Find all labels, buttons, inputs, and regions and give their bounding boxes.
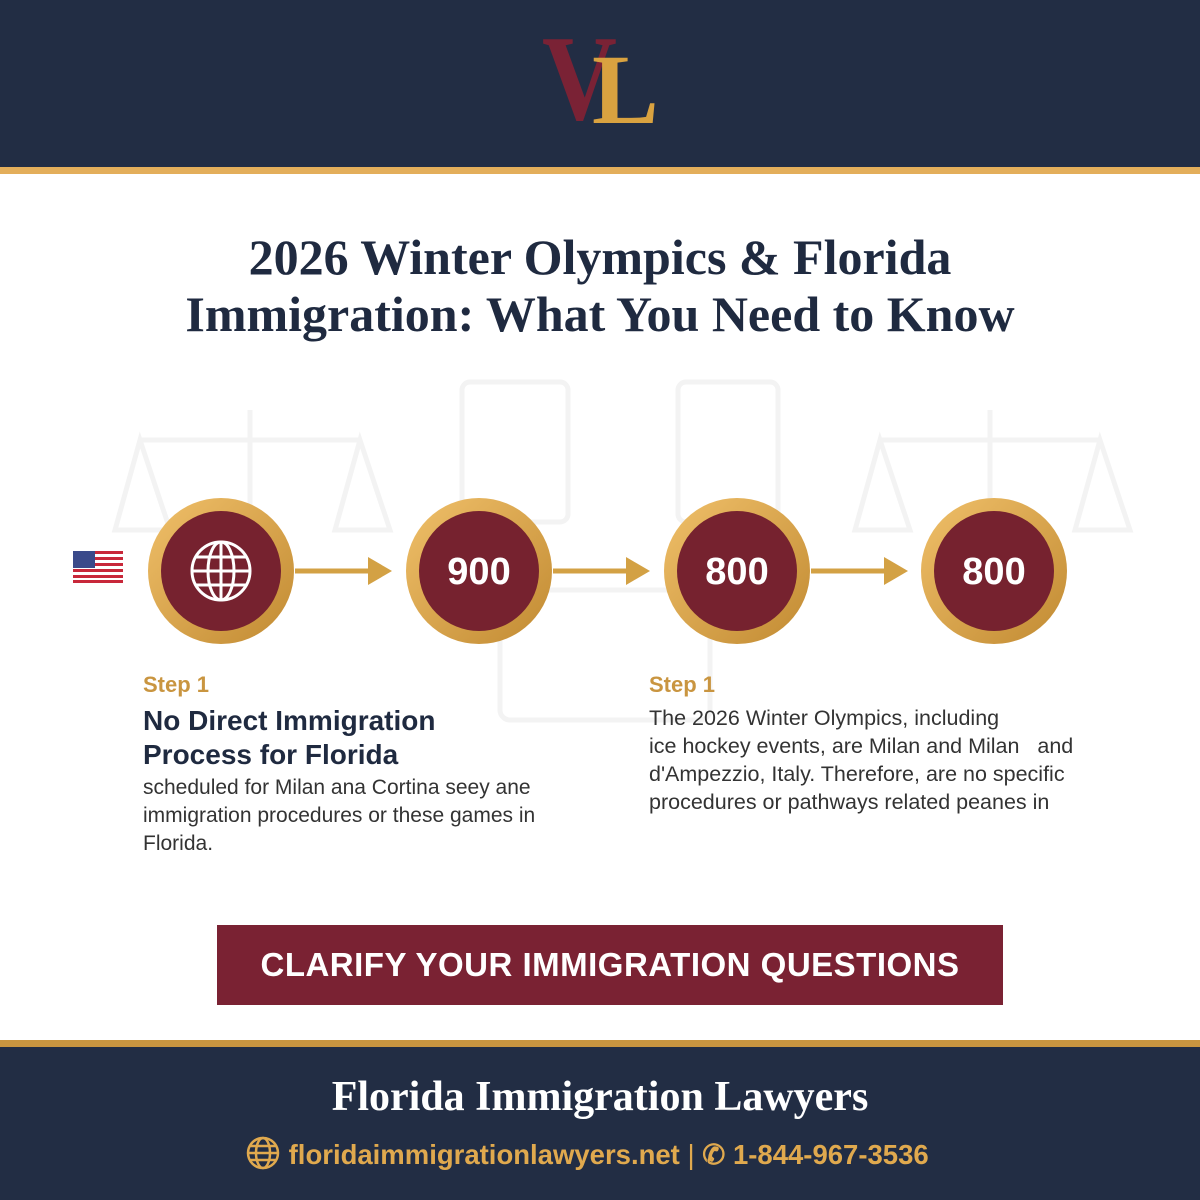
logo VL: V [542, 11, 617, 146]
logo VL: L [592, 34, 659, 145]
CTA button [217, 925, 1003, 1005]
title: 2026 Winter Olympics & Florida [249, 229, 951, 285]
footer contact: floridaimmigrationlawyers.net | ✆ 1-844-967-3536 [289, 1139, 929, 1170]
step 1 right text: procedures or pathways related peanes in [649, 790, 1049, 814]
step 1 left text: scheduled for Milan ana Cortina seey ane immigration procedures or these games in Florida. [143, 776, 535, 855]
icon: US flag [73, 551, 123, 583]
icon: globe [192, 542, 250, 600]
footer [0, 1040, 1200, 1200]
background watermark icons [112, 380, 1134, 722]
title [185, 229, 1015, 342]
process timeline [148, 498, 1067, 644]
process timeline: 900 [447, 551, 511, 593]
step 1 left text [143, 672, 535, 855]
step 1 right text: ice hockey events, are Milan and Milan and [649, 734, 1073, 758]
step 1 right text: The 2026 Winter Olympics, including [649, 706, 999, 730]
step 1 right text [649, 672, 1073, 814]
header band [0, 0, 1200, 174]
step 1 left text: Process for Florida [143, 739, 398, 770]
step 1 left text: No Direct Immigration [143, 705, 435, 736]
step 1 right text: d'Ampezzio, Italy. Therefore, are no specific [649, 762, 1065, 786]
footer name: Florida Immigration Lawyers [332, 1074, 868, 1120]
process timeline: 800 [962, 551, 1026, 593]
step 1 left text: Step 1 [143, 672, 209, 697]
logo VL [542, 11, 659, 146]
process timeline: 800 [705, 551, 769, 593]
step 1 right text: Step 1 [649, 672, 715, 697]
CTA button: CLARIFY YOUR IMMIGRATION QUESTIONS [260, 946, 960, 983]
title: Immigration: What You Need to Know [185, 286, 1015, 342]
